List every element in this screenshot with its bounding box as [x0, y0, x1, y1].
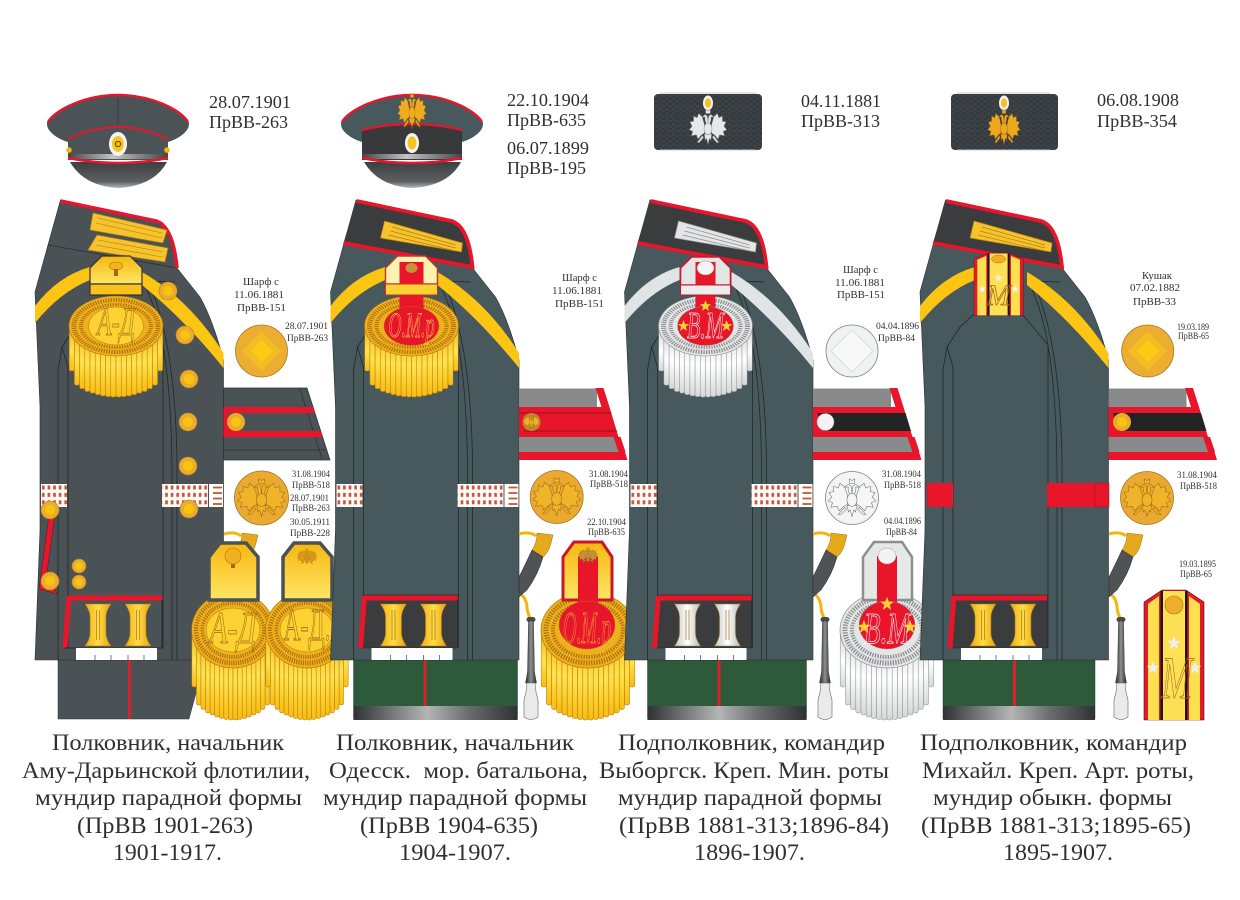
small decree labels 4: ПрВВ-65: [1178, 331, 1209, 341]
uniform 3: lieutenant colonel, Vyborg mine company: [624, 200, 813, 720]
small decree labels 4: ПрВВ-65: [1180, 569, 1212, 579]
small decree labels 2: 31.08.1904: [589, 469, 628, 479]
scarf label 1: [234, 276, 286, 314]
caption 3: 1896-1907.: [694, 840, 805, 865]
parade epaulette В.М silver: [840, 542, 934, 720]
parade epaulette В.М silver: В.М: [864, 604, 911, 653]
cap date label 2: ПрВВ-195: [507, 158, 586, 178]
small decree labels 4: 19.03.189: [1177, 322, 1209, 332]
gold button detail 1: [236, 325, 288, 377]
cap date label 2: ПрВВ-635: [507, 110, 586, 130]
cap date label 3: ПрВВ-313: [801, 111, 880, 131]
sash label 4: ПрВВ-33: [1133, 296, 1177, 308]
sash label 4: 07.02.1882: [1130, 282, 1180, 294]
caption 1: Полковник, начальник: [52, 730, 285, 755]
caption 4: [920, 730, 1194, 865]
small decree labels 3: 31.08.1904: [882, 469, 921, 479]
chest epaulette 2: О.М.р: [388, 305, 434, 345]
caption 2: [323, 730, 588, 865]
small decree labels 3: 04.04.1896: [876, 321, 920, 331]
caption 3: [599, 730, 889, 865]
scarf label 1: ПрВВ-151: [237, 302, 286, 314]
small decree labels 3: ПрВВ-518: [884, 480, 921, 490]
chest epaulette 1: А-Д: [95, 299, 137, 344]
silver eagle medal: [826, 472, 878, 524]
small decree labels 2: ПрВВ-635: [588, 527, 625, 537]
caption 4: (ПрВВ 1881-313;1895-65): [921, 813, 1191, 838]
small decree labels 1: ПрВВ-263: [292, 503, 330, 513]
small decree labels 1: 31.08.1904: [292, 469, 330, 479]
scarf label 2: Шарф с: [562, 272, 597, 284]
scarf label 3: 11.06.1881: [835, 277, 885, 289]
parade epaulette О.М.р: О.М.р: [563, 602, 611, 653]
small decree labels 2: [587, 469, 628, 537]
side tab 1: [224, 388, 330, 460]
small decree labels 1: 30.05.1911: [290, 517, 330, 527]
cap date label 2: [507, 90, 589, 178]
cap: peaked cap, Odessa naval battalion: [341, 93, 483, 188]
cap date label 1: 28.07.1901: [209, 92, 291, 112]
caption 1: 1901-1917.: [113, 840, 222, 865]
caption 4: Михайл. Креп. Арт. роты,: [922, 758, 1194, 783]
small decree labels 4: ПрВВ-518: [1180, 481, 1217, 491]
sash label 4: [1130, 270, 1180, 308]
chest epaulette 3: [658, 257, 752, 397]
shoulder board on chest: [974, 253, 1023, 315]
scarf label 1: 11.06.1881: [234, 289, 284, 301]
small decree labels 2: ПрВВ-518: [590, 479, 628, 489]
caption 3: (ПрВВ 1881-313;1896-84): [619, 813, 889, 838]
cap: fur cap, gold eagle: [951, 93, 1058, 150]
caption 4: Подполковник, командир: [920, 730, 1187, 755]
caption 4: 1895-1907.: [1003, 840, 1113, 865]
cap date label 4: 06.08.1908: [1097, 90, 1179, 110]
caption 1: мундир парадной формы: [35, 785, 302, 810]
small decree labels 1: 28.07.1901: [285, 321, 328, 331]
cap date label 4: ПрВВ-354: [1097, 111, 1177, 131]
chest epaulette 3: В.М: [687, 305, 725, 347]
small decree labels 1: ПрВВ-263: [287, 333, 329, 343]
scarf label 1: Шарф с: [243, 276, 279, 288]
small decree labels 3: ПрВВ-84: [886, 527, 917, 537]
small decree labels 4: 19.03.1895: [1179, 559, 1216, 569]
scarf label 3: Шарф с: [843, 264, 878, 276]
caption 3: Подполковник, командир: [618, 730, 885, 755]
uniform 2: colonel, Odessa naval battalion: [330, 200, 519, 720]
scarf label 3: ПрВВ-151: [837, 289, 885, 301]
cap date label 4: [1097, 90, 1179, 131]
caption 2: (ПрВВ 1904-635): [360, 813, 538, 838]
caption 2: мундир парадной формы: [323, 785, 587, 810]
small decree labels 4: 31.08.1904: [1177, 470, 1217, 480]
sabre hilt and tassel 3: [813, 533, 847, 720]
caption 3: Выборгск. Креп. Мин. роты: [599, 758, 889, 783]
chest epaulette 2: [364, 256, 458, 397]
small decree labels 3: [876, 321, 921, 537]
caption 2: Одесск. мор. батальона,: [329, 758, 588, 783]
gold eagle medal 1: [234, 471, 288, 525]
parade epaulette О.М.р: [541, 542, 635, 720]
scarf label 2: ПрВВ-151: [555, 298, 604, 310]
small decree labels 3: ПрВВ-84: [878, 333, 916, 343]
small decree labels 3: 04.04.1896: [884, 516, 921, 526]
large shoulder board: М: [1161, 645, 1194, 711]
parade epaulette А-Д. block: А-Д.: [284, 599, 330, 650]
parade epaulette А-Д. block: [266, 543, 348, 720]
shoulder board on chest: М: [986, 279, 1012, 312]
side tab 2: [519, 388, 628, 460]
chest epaulette 1: [69, 256, 163, 397]
scarf label 2: 11.06.1881: [552, 285, 602, 297]
small decree labels 1: [285, 321, 330, 538]
cap: fur cap, silver eagle: [654, 93, 762, 150]
gold button detail 4: [1122, 325, 1174, 377]
small decree labels 1: ПрВВ-518: [292, 480, 330, 490]
silver button detail: [826, 325, 878, 377]
sash label 4: Кушак: [1142, 270, 1173, 282]
small decree labels 1: 28.07.1901: [290, 493, 329, 503]
scarf label 3: [835, 264, 885, 301]
scarf label 2: [552, 272, 604, 310]
cap date label 3: 04.11.1881: [801, 91, 881, 111]
cap date label 1: [209, 92, 291, 132]
small decree labels 4: [1177, 322, 1217, 579]
small decree labels 2: 22.10.1904: [587, 517, 626, 527]
caption 4: мундир обыкн. формы: [933, 785, 1172, 810]
large shoulder board: [1144, 590, 1204, 720]
parade epaulette А-Д script: А-Д: [208, 602, 258, 653]
cap date label 1: ПрВВ-263: [209, 112, 288, 132]
uniform 1: colonel, Amu-Darya flotilla: [35, 200, 224, 719]
cap: peaked cap, Amu-Darya flotilla: [47, 94, 189, 188]
sabre hilt and tassel 2: [519, 533, 553, 720]
caption 1: [22, 730, 310, 865]
caption 2: Полковник, начальник: [336, 730, 575, 755]
parade epaulette А-Д script: [192, 543, 274, 720]
caption 2: 1904-1907.: [399, 840, 511, 865]
cap date label 3: [801, 91, 881, 131]
sabre hilt and tassel 4: [1109, 533, 1143, 720]
small decree labels 1: ПрВВ-228: [290, 528, 330, 538]
gold eagle medal 2: [530, 470, 583, 524]
sabre hilt behind epaulettes 1: [224, 533, 258, 720]
caption 1: (ПрВВ 1901-263): [77, 813, 253, 838]
gold eagle medal 4: [1120, 472, 1174, 524]
uniform 4: lieutenant colonel, Mikhailovsk fortress artillery: [920, 200, 1109, 720]
caption 3: мундир парадной формы: [618, 785, 882, 810]
side tab 4: [1108, 388, 1217, 460]
caption 1: Аму-Дарьинской флотилии,: [22, 758, 310, 783]
cap date label 2: 22.10.1904: [507, 90, 589, 110]
cap date label 2: 06.07.1899: [507, 138, 589, 158]
side tab 3: [813, 388, 922, 460]
